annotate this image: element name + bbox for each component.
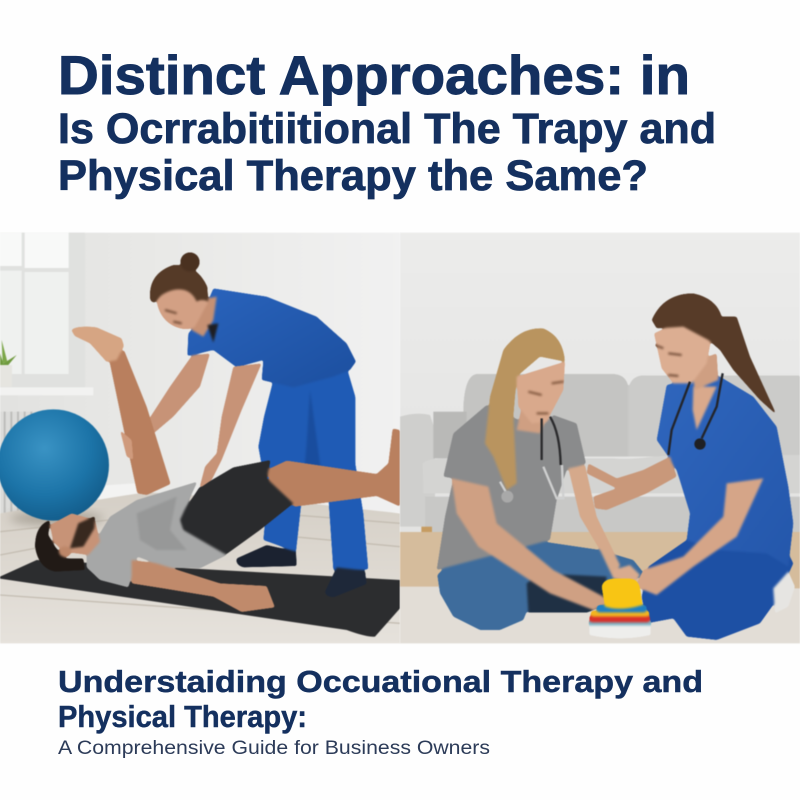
tagline: A Comprehensive Guide for Business Owners [58, 738, 490, 759]
shirt shading [137, 497, 187, 550]
title [58, 44, 716, 200]
seated woman eyes [528, 382, 563, 413]
floor [0, 492, 400, 643]
exercise ball [0, 409, 109, 521]
nurse trousers [642, 540, 793, 640]
therapist neck [192, 297, 217, 337]
nurse stethoscope chest piece [694, 438, 706, 450]
title line 1: Distinct Approaches: in [58, 44, 690, 106]
therapist gripping hand [120, 430, 133, 460]
man neck and face [50, 513, 100, 555]
horizontal leg [267, 428, 400, 507]
sofa side cushion [433, 412, 467, 458]
nurse top [657, 377, 793, 567]
subtitle line 1: Understaiding Occuational Therapy and [58, 664, 703, 699]
stacking toy [589, 579, 651, 638]
seated woman hair [485, 328, 565, 490]
therapist shirt [187, 288, 356, 387]
sofa base [425, 497, 800, 532]
therapist eye [165, 310, 182, 323]
exercise mat [0, 560, 400, 637]
therapist back arm [148, 353, 210, 435]
nurse stethoscope [668, 373, 723, 455]
nurse face [654, 320, 712, 383]
seated woman arm right [568, 465, 620, 578]
man arm [132, 560, 275, 612]
man hair [35, 520, 85, 572]
seated woman shirt [437, 405, 586, 570]
raised foot [71, 327, 124, 362]
seated woman face [517, 362, 565, 423]
title line 2: Is Ocrrabitiitional The Trapy and [58, 105, 716, 153]
nurse arm reaching [587, 457, 677, 510]
ball shadow [10, 512, 103, 525]
therapist hair [150, 265, 208, 303]
radiator [0, 412, 38, 513]
therapist front arm and hands [120, 363, 262, 488]
nurse neckline [693, 387, 717, 430]
therapist front arm [199, 363, 262, 488]
therapist shoe left [236, 545, 297, 567]
window [0, 233, 93, 395]
skirting [85, 483, 138, 502]
panel: physical therapy photo [0, 233, 400, 643]
floor [400, 532, 800, 589]
nurse eyes [655, 345, 682, 376]
man beard [70, 516, 95, 548]
stethoscope chest piece [501, 491, 513, 503]
seated woman jeans [437, 542, 647, 630]
stethoscope on seated woman [500, 417, 563, 498]
nurse shoe [773, 572, 795, 613]
patient figure [35, 327, 400, 612]
subtitle heading [58, 664, 703, 734]
nurse [587, 293, 795, 640]
wall [400, 233, 800, 533]
jeans dark fold [527, 573, 607, 613]
raised leg [109, 350, 171, 495]
panel: occupational therapy photo [400, 233, 800, 643]
therapist hair bun [180, 252, 200, 272]
nurse hair [652, 293, 777, 415]
nurse neck [690, 353, 718, 390]
therapist shoe right [325, 567, 367, 597]
therapist face [157, 283, 208, 329]
man shirt [87, 482, 227, 587]
floor planks [0, 513, 400, 623]
rug [400, 587, 800, 643]
plant [0, 340, 17, 387]
therapist figure [148, 252, 368, 597]
wall [0, 233, 400, 513]
trouser fold [302, 390, 328, 500]
man shorts [180, 460, 293, 554]
subtitle line 2: Physical Therapy: [58, 699, 307, 734]
nurse lower arm [635, 478, 763, 595]
therapist trousers [258, 362, 368, 570]
sofa arm [400, 414, 435, 527]
man ear [59, 546, 71, 557]
title line 3: Physical Therapy the Same? [58, 152, 648, 200]
seated woman neck [517, 400, 547, 433]
seated woman arm left [452, 478, 607, 610]
seated woman [437, 328, 647, 630]
sofa back cushions [463, 374, 800, 457]
sofa leg [421, 527, 432, 558]
seated woman hand [613, 565, 640, 583]
therapist undershirt [207, 323, 218, 343]
sofa seat [423, 455, 800, 493]
